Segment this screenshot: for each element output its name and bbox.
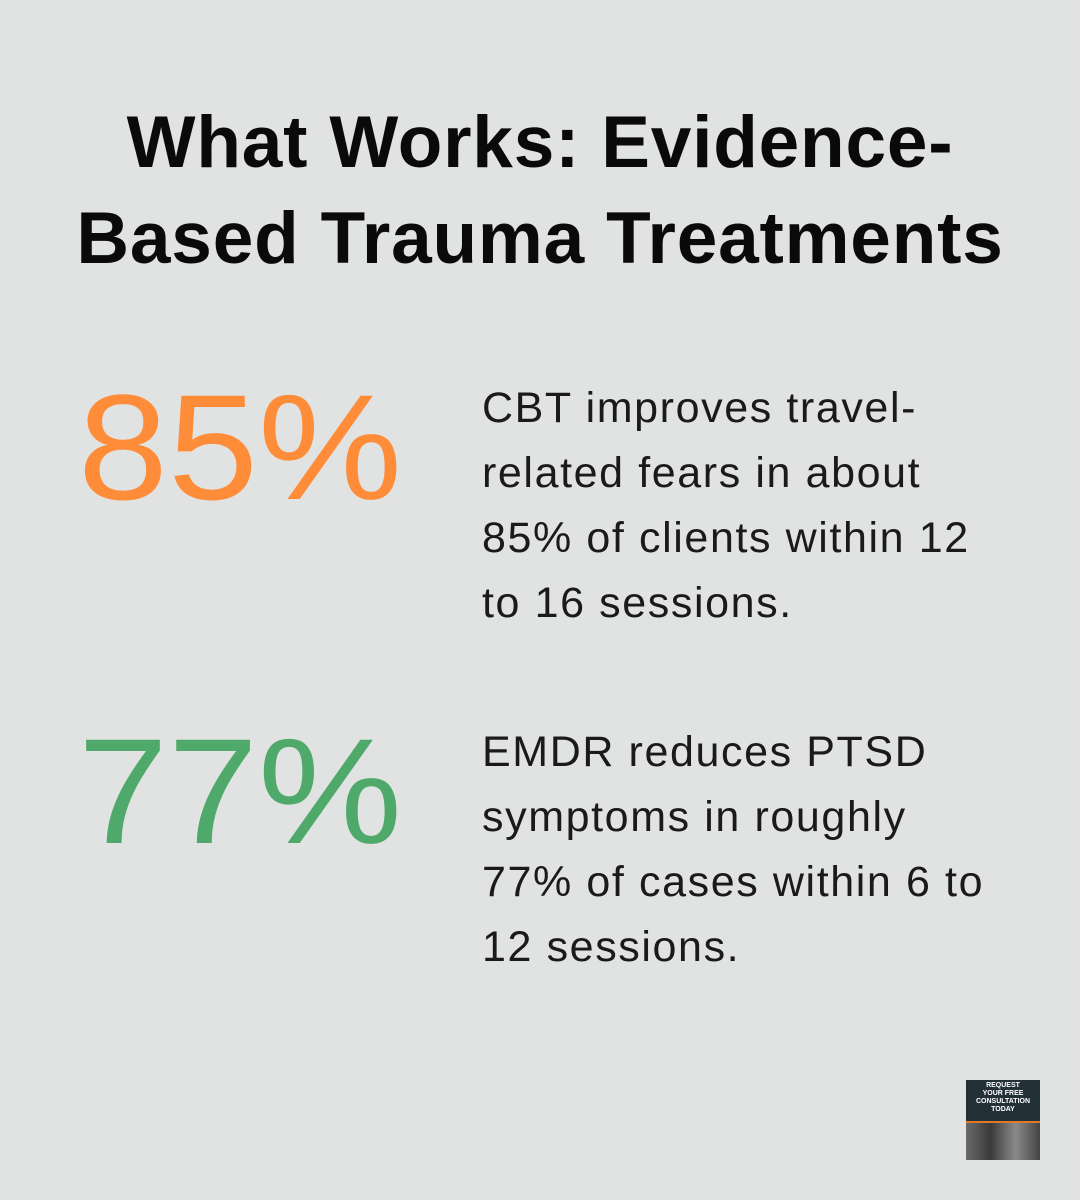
- text: EMDR: 12 sessions.: [482, 923, 740, 971]
- logo badge: TODAY: [991, 1106, 1015, 1113]
- text: CBT: related fears in about: [482, 449, 921, 497]
- stat: 85%: 85%: [78, 363, 402, 531]
- logo badge: [966, 1080, 1040, 1160]
- title: [76, 102, 1004, 279]
- stat: 77%: 77%: [78, 707, 402, 875]
- logo badge: REQUEST: [986, 1082, 1020, 1089]
- logo badge: CONSULTATION: [976, 1098, 1030, 1105]
- text: EMDR: symptoms in roughly: [482, 793, 907, 841]
- title: What Works: Evidence-: [127, 102, 953, 183]
- title: Based Trauma Treatments: [76, 198, 1004, 279]
- text: EMDR: EMDR reduces PTSD: [482, 728, 927, 776]
- text: CBT: [482, 384, 970, 627]
- text: CBT: CBT improves travel-: [482, 384, 917, 432]
- text: EMDR: [482, 728, 984, 971]
- text: EMDR: 77% of cases within 6 to: [482, 858, 984, 906]
- text: CBT: 85% of clients within 12: [482, 514, 970, 562]
- text: CBT: to 16 sessions.: [482, 579, 793, 627]
- logo badge: YOUR FREE: [983, 1090, 1023, 1097]
